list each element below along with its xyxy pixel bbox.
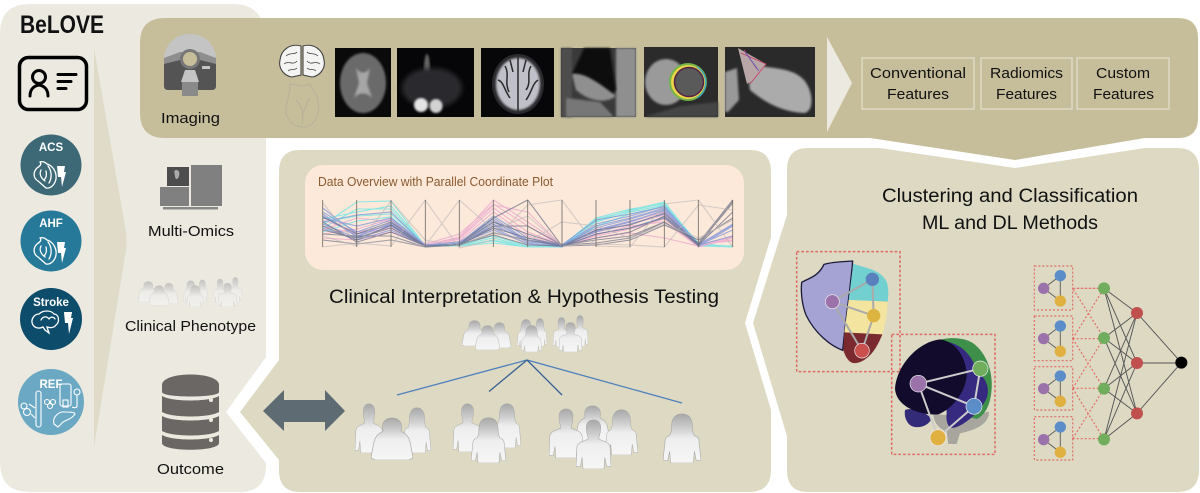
- icon: subgroup 2: [453, 404, 521, 463]
- heading: BeLOVE: BeLOVE: [20, 11, 104, 39]
- box: conventional features: Conventional: [870, 65, 966, 82]
- icon: clinical phenotype crowd: [138, 277, 242, 307]
- diagram: graph neural network: [1034, 266, 1187, 460]
- icon: Stroke: Stroke: [33, 297, 69, 309]
- icon: ACS: [20, 134, 82, 196]
- chart lines: [323, 200, 733, 248]
- box: radiomics features: [981, 58, 1072, 109]
- box: radiomics features: Radiomics: [990, 65, 1063, 82]
- images: MRI scans: [335, 47, 815, 117]
- image: brain MRI 2: [397, 48, 474, 117]
- panel: clinical interpretation: [240, 150, 771, 492]
- heading: clinical interpretation: Clinical Interpretation & Hypothesis Testing: [329, 287, 719, 308]
- icon: AHF: AHF: [39, 218, 63, 230]
- icon: heart outline: [286, 84, 319, 127]
- icon: patient card: [20, 58, 86, 110]
- tree: cohort subgroups: [397, 360, 682, 403]
- diagram: brain graph: [892, 334, 995, 454]
- label: Imaging: Imaging: [161, 110, 220, 127]
- icon: Stroke: [20, 288, 82, 350]
- chart title: Data Overview with Parallel Coordinate Plot: [318, 175, 554, 189]
- diagram: heart graph: [797, 252, 900, 372]
- heading: clustering and classification: Clustering and Classification: [882, 186, 1138, 207]
- icon: brain outline: [280, 45, 324, 77]
- icon: subgroup 4: [663, 414, 701, 463]
- chart axes: [323, 200, 733, 247]
- image: brain MRI 1: [335, 48, 391, 117]
- panel: BeLOVE cohort: [0, 4, 266, 492]
- icon: multi-omics analyser: [160, 165, 222, 210]
- icon: outcome database: [162, 374, 219, 450]
- image: sagittal cardiac MRI: [561, 48, 636, 117]
- arrow: imaging to features: [827, 37, 852, 132]
- box: custom features: Features: [1093, 86, 1154, 103]
- image: brain MRI 3: [481, 48, 554, 117]
- box: conventional features: Features: [887, 86, 949, 103]
- image: cardiac long-axis with annotation: [725, 47, 815, 117]
- icon: MRI scanner: [164, 34, 216, 96]
- icon: ACS: ACS: [39, 142, 63, 154]
- icon: subgroup 1: [355, 404, 431, 460]
- box: custom features: Custom: [1096, 65, 1150, 82]
- arrow: cohort to data: [94, 48, 126, 447]
- box: radiomics features: Features: [996, 86, 1057, 103]
- label: Clinical Phenotype: Clinical Phenotype: [125, 318, 256, 335]
- icon: subgroup 3: [549, 406, 638, 469]
- panel: clustering and classification: [753, 148, 1199, 492]
- icon: AHF: [20, 210, 82, 272]
- box: conventional features: [862, 58, 974, 109]
- image: cardiac short-axis with contours: [644, 47, 718, 117]
- panel: imaging: [140, 18, 1198, 160]
- label: Outcome: Outcome: [157, 461, 224, 478]
- box: custom features: [1077, 58, 1169, 109]
- arrow: two-way link: [263, 390, 345, 431]
- icon: REF: REF: [40, 379, 62, 391]
- icon: whole cohort crowd: [462, 316, 588, 352]
- chart: parallel coordinate plot: [305, 165, 744, 270]
- heading: ML and DL methods: ML and DL Methods: [922, 213, 1098, 234]
- label: Multi-Omics: Multi-Omics: [148, 223, 234, 240]
- icon: REF: [18, 369, 84, 435]
